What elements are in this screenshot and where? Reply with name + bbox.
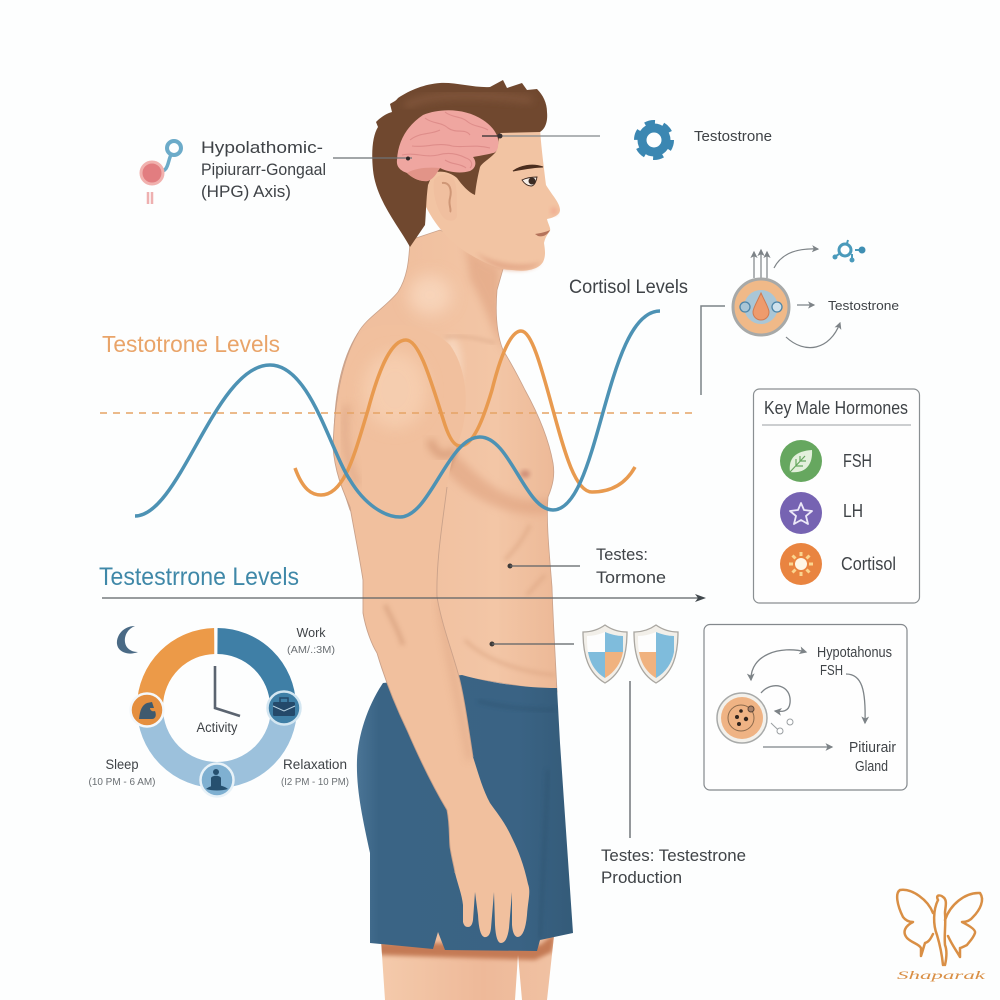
label: pituitary gland: Pitiurair	[849, 740, 896, 756]
icon: moon	[117, 626, 138, 654]
icon: sun	[780, 543, 822, 585]
label: work	[287, 626, 335, 656]
label: Cortisol: Cortisol	[841, 554, 896, 574]
callout: testes tormone: Tormone	[596, 568, 666, 587]
brain	[397, 110, 498, 181]
torso front edge	[448, 445, 457, 470]
small molecule glyphs	[777, 719, 793, 734]
label: Testostrone	[828, 298, 899, 313]
face	[425, 120, 560, 271]
human figure	[333, 80, 573, 1000]
connector	[701, 306, 725, 395]
heading: cortisol levels: Cortisol Levels	[569, 277, 688, 298]
label: FSH: FSH	[820, 663, 843, 679]
reference dashed line	[100, 412, 692, 414]
label: relaxation	[281, 756, 349, 788]
icon: meditation	[200, 764, 234, 796]
jaw edge shadow	[476, 252, 541, 270]
torso and neck	[334, 230, 557, 692]
timeline arrow	[102, 594, 706, 602]
legs	[378, 930, 556, 1000]
shorts	[357, 675, 573, 951]
activity donut chart	[88, 626, 349, 796]
label: sleep	[88, 756, 156, 788]
mouth	[535, 230, 550, 236]
label: pituitary gland: Gland	[855, 759, 888, 775]
arm and hand	[333, 325, 529, 943]
hormone level chart	[100, 311, 692, 517]
icon: star	[780, 492, 822, 534]
heading: testotrone levels: Testotrone Levels	[102, 331, 280, 357]
label: pituitary gland	[849, 740, 896, 775]
arm outlines	[333, 333, 473, 873]
hair	[372, 80, 547, 247]
arrows	[751, 650, 865, 747]
HPG axis text: Pipiurarr-Gongaal	[201, 160, 326, 179]
butterfly	[897, 890, 982, 965]
ring: work	[218, 641, 283, 705]
head	[372, 80, 560, 271]
icon: shield left	[583, 625, 627, 683]
label: work: Work	[296, 626, 326, 640]
label: relaxation: (I2 PM - 10 PM)	[281, 776, 349, 788]
callout: testes production: Production	[601, 868, 682, 887]
label: activity: Activity	[196, 720, 238, 735]
callout: testes production	[601, 681, 746, 887]
icon: gear	[636, 122, 672, 158]
clock hands	[215, 666, 240, 716]
icon: HPG axis gland	[141, 141, 181, 204]
cell diagram: testostrone	[701, 240, 899, 395]
ring: activity	[150, 641, 214, 705]
callout: testes production: Testes: Testestrone	[601, 846, 746, 865]
label: FSH: FSH	[843, 451, 872, 471]
label: sleep: (10 PM - 6 AM)	[88, 776, 156, 788]
callout: testes tormone	[508, 545, 666, 587]
icon: briefcase	[268, 692, 300, 724]
eye	[522, 177, 537, 186]
ring gap mask	[214, 628, 217, 654]
label: LH: LH	[843, 501, 863, 521]
ear	[434, 174, 457, 221]
icon: molecule	[832, 240, 866, 262]
heading: testestrrone levels: Testestrrone Levels	[99, 563, 299, 591]
icon: muscle	[130, 694, 164, 726]
hair highlight	[405, 95, 532, 106]
label: relaxation: Relaxation	[283, 756, 347, 772]
icon: shield right	[634, 625, 678, 683]
label: hypotahonus: Hypotahonus	[817, 645, 892, 661]
nose tip blush	[550, 207, 558, 215]
label: testostrone top: Testostrone	[694, 129, 772, 145]
ring: relaxation and sleep	[150, 708, 284, 775]
logo word: Shaparak	[897, 968, 986, 982]
blue curve	[135, 311, 660, 517]
panel: key male hormones	[754, 389, 920, 603]
cell	[733, 279, 789, 335]
panel: feedback loop	[704, 624, 907, 790]
curved arrows	[774, 249, 818, 268]
label: work: (AM/.:3M)	[287, 644, 335, 656]
brain leader line to HPG axis	[333, 156, 412, 160]
brain leader line to testostrone	[482, 134, 600, 138]
HPG axis text: (HPG) Axis)	[201, 182, 291, 201]
torso shading	[408, 245, 555, 675]
icon: leaf	[780, 440, 822, 482]
output arrows up	[754, 250, 767, 278]
watermark: Shaparak butterfly logo	[897, 890, 986, 982]
waistband and pleat shading	[478, 701, 555, 938]
cell	[717, 693, 767, 743]
HPG axis text	[201, 138, 326, 201]
arm shading	[345, 352, 470, 760]
HPG axis text: Hypolathomic-	[201, 138, 323, 157]
panel heading: Key Male Hormones	[764, 398, 908, 418]
callout line to shields	[490, 642, 574, 646]
orange curve	[295, 331, 635, 495]
label: sleep: Sleep	[106, 756, 139, 772]
eyebrow	[513, 165, 543, 171]
callout: testes tormone: Testes:	[596, 545, 648, 564]
